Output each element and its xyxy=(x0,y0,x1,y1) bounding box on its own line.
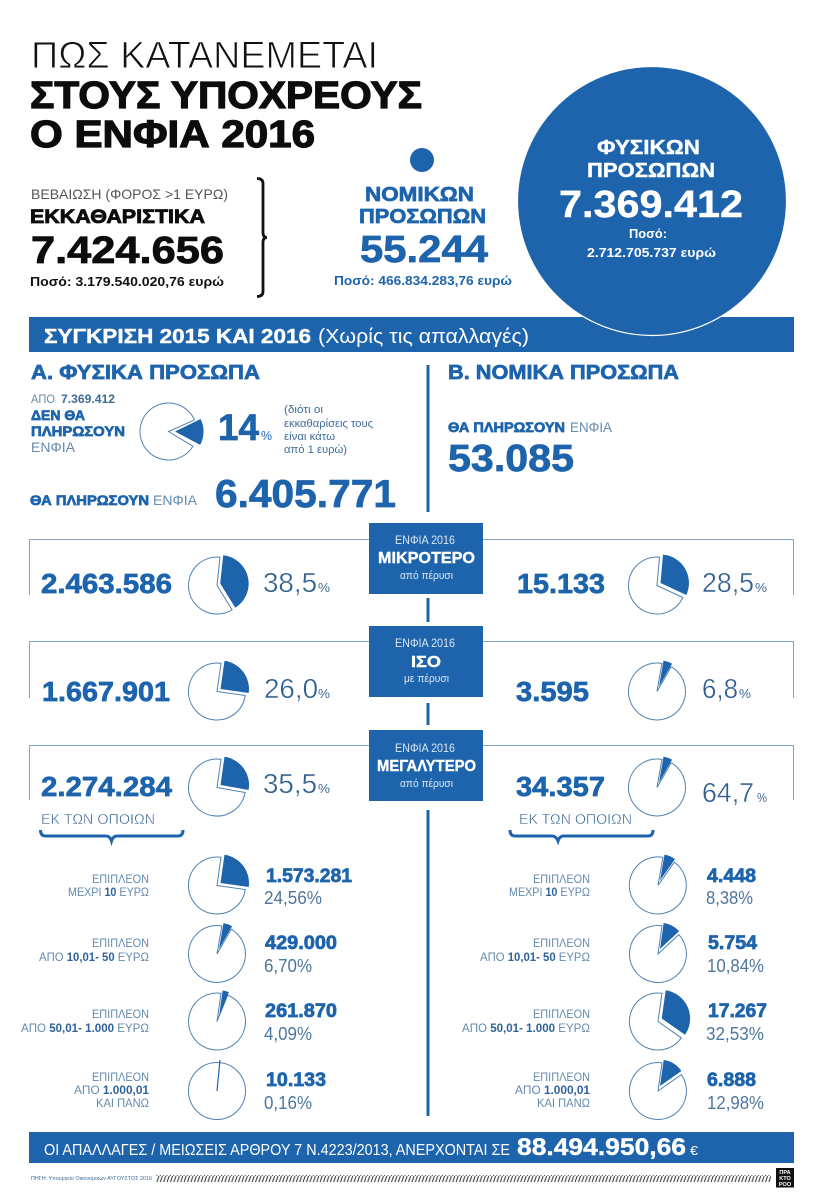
left sub row 4: ΕΠΙΠΛΕΟΝ xyxy=(92,1072,149,1084)
row smaller: right percent: % xyxy=(755,580,767,595)
row larger: left value: 2.274.284 xyxy=(41,771,172,802)
left sub row 4: ΚΑΙ ΠΑΝΩ xyxy=(96,1098,149,1110)
row smaller: right percent: 28,5 xyxy=(702,567,754,598)
left sub row 2: 6,70% xyxy=(264,956,312,976)
left sub row 2 xyxy=(39,923,337,982)
row smaller: left value: 2.463.586 xyxy=(41,568,172,599)
big circle: natural persons: 7.369.412 xyxy=(559,184,743,226)
note: why exempt: (διότι οι xyxy=(284,404,324,416)
left sub row 2: ΕΠΙΠΛΕΟΝ xyxy=(92,938,149,950)
right sub row 1: 4.448 xyxy=(707,866,756,887)
text block: legal entities will pay: ΘΑ ΠΛΗΡΩΣΟΥΝ xyxy=(448,419,565,435)
text block: will not pay: ΠΛΗΡΩΣΟΥΝ xyxy=(31,423,125,439)
box: smaller than last year xyxy=(369,523,483,594)
text block: total tax notices xyxy=(30,186,228,289)
right sub row 3: ΑΠΟ 50,01- 1.000 ΕΥΡΩ xyxy=(462,1023,590,1035)
row larger: right value: 34.357 xyxy=(516,771,605,802)
text block: total tax notices: 7.424.656 xyxy=(31,230,224,272)
box: equal to last year: ΙΣΟ xyxy=(411,654,441,671)
text block: legal entities: Ποσό: 466.834.283,76 ευρώ xyxy=(334,273,512,288)
box: equal to last year: με πέρυσι xyxy=(404,673,450,685)
text block: will not pay: ΔΕΝ ΘΑ xyxy=(31,407,85,423)
left sub row 1: ΕΠΙΠΛΕΟΝ xyxy=(92,874,149,886)
box: equal to last year xyxy=(369,626,483,697)
right sub row 1: ΜΕΧΡΙ 10 ΕΥΡΩ xyxy=(509,887,590,899)
text block: will not pay: ΑΠΟ xyxy=(31,394,55,406)
right sub row 4 xyxy=(515,1060,764,1120)
text block: legal entities will pay: 53.085 xyxy=(448,438,574,480)
icon: small circle legal entities xyxy=(410,148,434,172)
logo: ΚΤΟ xyxy=(779,1176,791,1182)
icon: curly brace xyxy=(257,178,267,296)
text block: legal entities xyxy=(334,184,512,288)
right sub row 2: 10,84% xyxy=(707,956,764,976)
row larger: right percent: % xyxy=(757,790,767,805)
value: 14 percent: % xyxy=(261,428,272,443)
box: larger than last year: ΜΕΓΑΛΥΤΕΡΟ xyxy=(377,758,476,775)
text block: total tax notices: ΒΕΒΑΙΩΣΗ (ΦΟΡΟΣ >1 ΕΥΡΩ) xyxy=(31,186,228,202)
left sub row 4: 10.133 xyxy=(266,1070,326,1091)
value: 14 percent: 14 xyxy=(218,407,259,448)
title: ΠΩΣ ΚΑΤΑΝΕΜΕΤΑΙ xyxy=(31,35,378,77)
left sub row 4: ΑΠΟ 1.000,01 xyxy=(74,1085,150,1097)
right sub row 2: ΑΠΟ 10,01- 50 ΕΥΡΩ xyxy=(480,952,590,964)
text block: legal entities: ΝΟΜΙΚΩΝ xyxy=(365,184,474,206)
box: smaller than last year: ΜΙΚΡΟΤΕΡΟ xyxy=(378,550,475,567)
bottom bar: exemptions total: € xyxy=(690,1143,699,1158)
right sub row 4: ΑΠΟ 1.000,01 xyxy=(515,1085,591,1097)
right sub row 1: ΕΠΙΠΛΕΟΝ xyxy=(533,874,590,886)
footer source: ΠΗΓΗ: Υπουργείο Οικονομικών ΑΥΓΟΥΣΤΟΣ 2016 xyxy=(31,1175,152,1182)
text block: will not pay: 7.369.412 xyxy=(61,394,115,406)
right sub row 2: 5.754 xyxy=(708,933,757,954)
big circle: natural persons xyxy=(518,66,786,336)
big circle: natural persons: 2.712.705.737 ευρώ xyxy=(587,245,716,260)
right sub row 2 xyxy=(480,923,764,983)
note: why exempt: είναι κάτω xyxy=(284,431,335,443)
text block: legal entities: ΠΡΟΣΩΠΩΝ xyxy=(359,206,486,228)
text block: natural persons will pay: ΕΝΦΙΑ xyxy=(153,492,198,508)
text block: natural persons will pay: 6.405.771 xyxy=(215,473,396,516)
row smaller: right value: 15.133 xyxy=(517,568,605,599)
right sub row 4: ΚΑΙ ΠΑΝΩ xyxy=(537,1098,590,1110)
box: equal to last year: ΕΝΦΙΑ 2016 xyxy=(395,636,455,650)
right brace label: ΕΚ ΤΩΝ ΟΠΟΙΩΝ xyxy=(519,811,632,828)
logo xyxy=(776,1168,794,1188)
note: why exempt xyxy=(284,404,373,456)
row smaller: left pie xyxy=(188,555,249,614)
left brace label: ΕΚ ΤΩΝ ΟΠΟΙΩΝ xyxy=(41,811,155,828)
row larger: left pie xyxy=(189,757,249,816)
right sub row 3: 32,53% xyxy=(706,1024,764,1044)
panel heading: B legal entities: Β. ΝΟΜΙΚΑ ΠΡΟΣΩΠΑ xyxy=(448,362,679,384)
row equal: right value: 3.595 xyxy=(516,676,589,707)
text block: natural persons will pay xyxy=(30,473,396,516)
box: larger than last year xyxy=(369,730,483,801)
logo: ΡΟΟ xyxy=(779,1182,792,1188)
right sub row 3: 17.267 xyxy=(708,1001,767,1022)
row larger: right pie xyxy=(628,757,685,816)
title: ΣΤΟΥΣ ΥΠΟΧΡΕΟΥΣ xyxy=(30,75,422,117)
panel heading: A natural persons: Α. ΦΥΣΙΚΑ ΠΡΟΣΩΠΑ xyxy=(31,362,260,384)
right brace label xyxy=(510,811,653,841)
comparison heading bar xyxy=(29,317,794,352)
center divider xyxy=(426,365,430,1116)
row equal: left percent: % xyxy=(318,686,330,701)
right sub row 1 xyxy=(509,855,756,914)
box: larger than last year: από πέρυσι xyxy=(400,778,454,790)
bottom bar: exemptions total xyxy=(29,1132,794,1163)
title: Ο ΕΝΦΙΑ 2016 xyxy=(30,114,315,156)
row smaller: left percent: % xyxy=(318,580,330,595)
text block: natural persons will pay: ΘΑ ΠΛΗΡΩΣΟΥΝ xyxy=(30,492,149,508)
row equal: right percent: 6,8 xyxy=(702,673,738,704)
right sub row 3 xyxy=(462,990,767,1050)
right sub row 2: ΕΠΙΠΛΕΟΝ xyxy=(533,938,590,950)
row equal: right percent: % xyxy=(739,686,751,701)
right sub row 4: 12,98% xyxy=(707,1093,764,1113)
left brace label xyxy=(40,811,183,841)
left sub row 4 xyxy=(74,1060,326,1120)
note: why exempt: εκκαθαρίσεις τους xyxy=(284,418,373,430)
frame lines for three rows xyxy=(30,540,794,800)
box: larger than last year: ΕΝΦΙΑ 2016 xyxy=(395,741,455,755)
row larger: left percent: 35,5 xyxy=(263,768,317,799)
left sub row 3 xyxy=(21,991,337,1050)
row equal: left percent: 26,0 xyxy=(264,673,318,704)
title xyxy=(30,35,422,156)
big circle: natural persons: ΠΡΟΣΩΠΩΝ xyxy=(587,160,715,182)
text block: will not pay xyxy=(31,394,125,455)
big circle: natural persons: ΦΥΣΙΚΩΝ xyxy=(597,137,700,159)
row equal: left pie xyxy=(188,661,249,720)
left sub row 1: 1.573.281 xyxy=(266,866,352,887)
left sub row 4: 0,16% xyxy=(264,1093,312,1113)
big circle: natural persons: Ποσό: xyxy=(629,226,667,241)
row larger: left percent: % xyxy=(318,781,330,796)
left sub row 1: 24,56% xyxy=(264,888,322,908)
left sub row 2: 429.000 xyxy=(265,933,337,954)
left sub row 2: ΑΠΟ 10,01- 50 ΕΥΡΩ xyxy=(39,952,149,964)
right sub row 1: 8,38% xyxy=(706,888,753,908)
text block: total tax notices: ΕΚΚΑΘΑΡΙΣΤΙΚΑ xyxy=(30,207,205,228)
footer hatch xyxy=(156,1175,771,1182)
row smaller: left percent: 38,5 xyxy=(263,567,317,598)
box: smaller than last year: από πέρυσι xyxy=(400,570,454,582)
pie: 14 percent xyxy=(140,403,204,460)
box: smaller than last year: ΕΝΦΙΑ 2016 xyxy=(395,533,455,547)
comparison heading bar: ΣΥΓΚΡΙΣΗ 2015 ΚΑΙ 2016 xyxy=(44,326,311,348)
comparison heading bar: (Χωρίς τις απαλλαγές) xyxy=(318,326,529,348)
text block: total tax notices: Ποσό: 3.179.540.020,76 ευρώ xyxy=(30,274,224,289)
row equal: right pie xyxy=(628,661,685,720)
row smaller: right pie xyxy=(628,555,689,614)
right sub row 3: ΕΠΙΠΛΕΟΝ xyxy=(533,1009,590,1021)
text block: legal entities: 55.244 xyxy=(360,229,488,271)
right sub row 4: ΕΠΙΠΛΕΟΝ xyxy=(533,1072,590,1084)
text block: legal entities will pay xyxy=(448,419,613,480)
bottom bar: exemptions total: ΟΙ ΑΠΑΛΛΑΓΕΣ / ΜΕΙΩΣΕΙΣ ΑΡΘΡΟΥ 7 Ν.4223/2013, ΑΝΕΡΧΟΝΤΑΙ ΣΕ xyxy=(44,1142,510,1159)
text block: legal entities will pay: ΕΝΦΙΑ xyxy=(570,419,613,435)
text block: will not pay: ΕΝΦΙΑ xyxy=(31,439,76,455)
logo: ΠΡΑ xyxy=(779,1170,791,1176)
left sub row 1: ΜΕΧΡΙ 10 ΕΥΡΩ xyxy=(68,887,149,899)
note: why exempt: από 1 ευρώ) xyxy=(284,444,347,456)
left sub row 3: 261.870 xyxy=(265,1001,337,1022)
left sub row 3: ΑΠΟ 50,01- 1.000 ΕΥΡΩ xyxy=(21,1023,149,1035)
left sub row 1 xyxy=(68,855,352,914)
left sub row 3: 4,09% xyxy=(264,1024,312,1044)
bottom bar: exemptions total: 88.494.950,66 xyxy=(517,1134,686,1161)
row equal: left value: 1.667.901 xyxy=(42,676,170,707)
row larger: right percent: 64,7 xyxy=(702,777,754,808)
left sub row 3: ΕΠΙΠΛΕΟΝ xyxy=(92,1009,149,1021)
right sub row 4: 6.888 xyxy=(707,1070,756,1091)
